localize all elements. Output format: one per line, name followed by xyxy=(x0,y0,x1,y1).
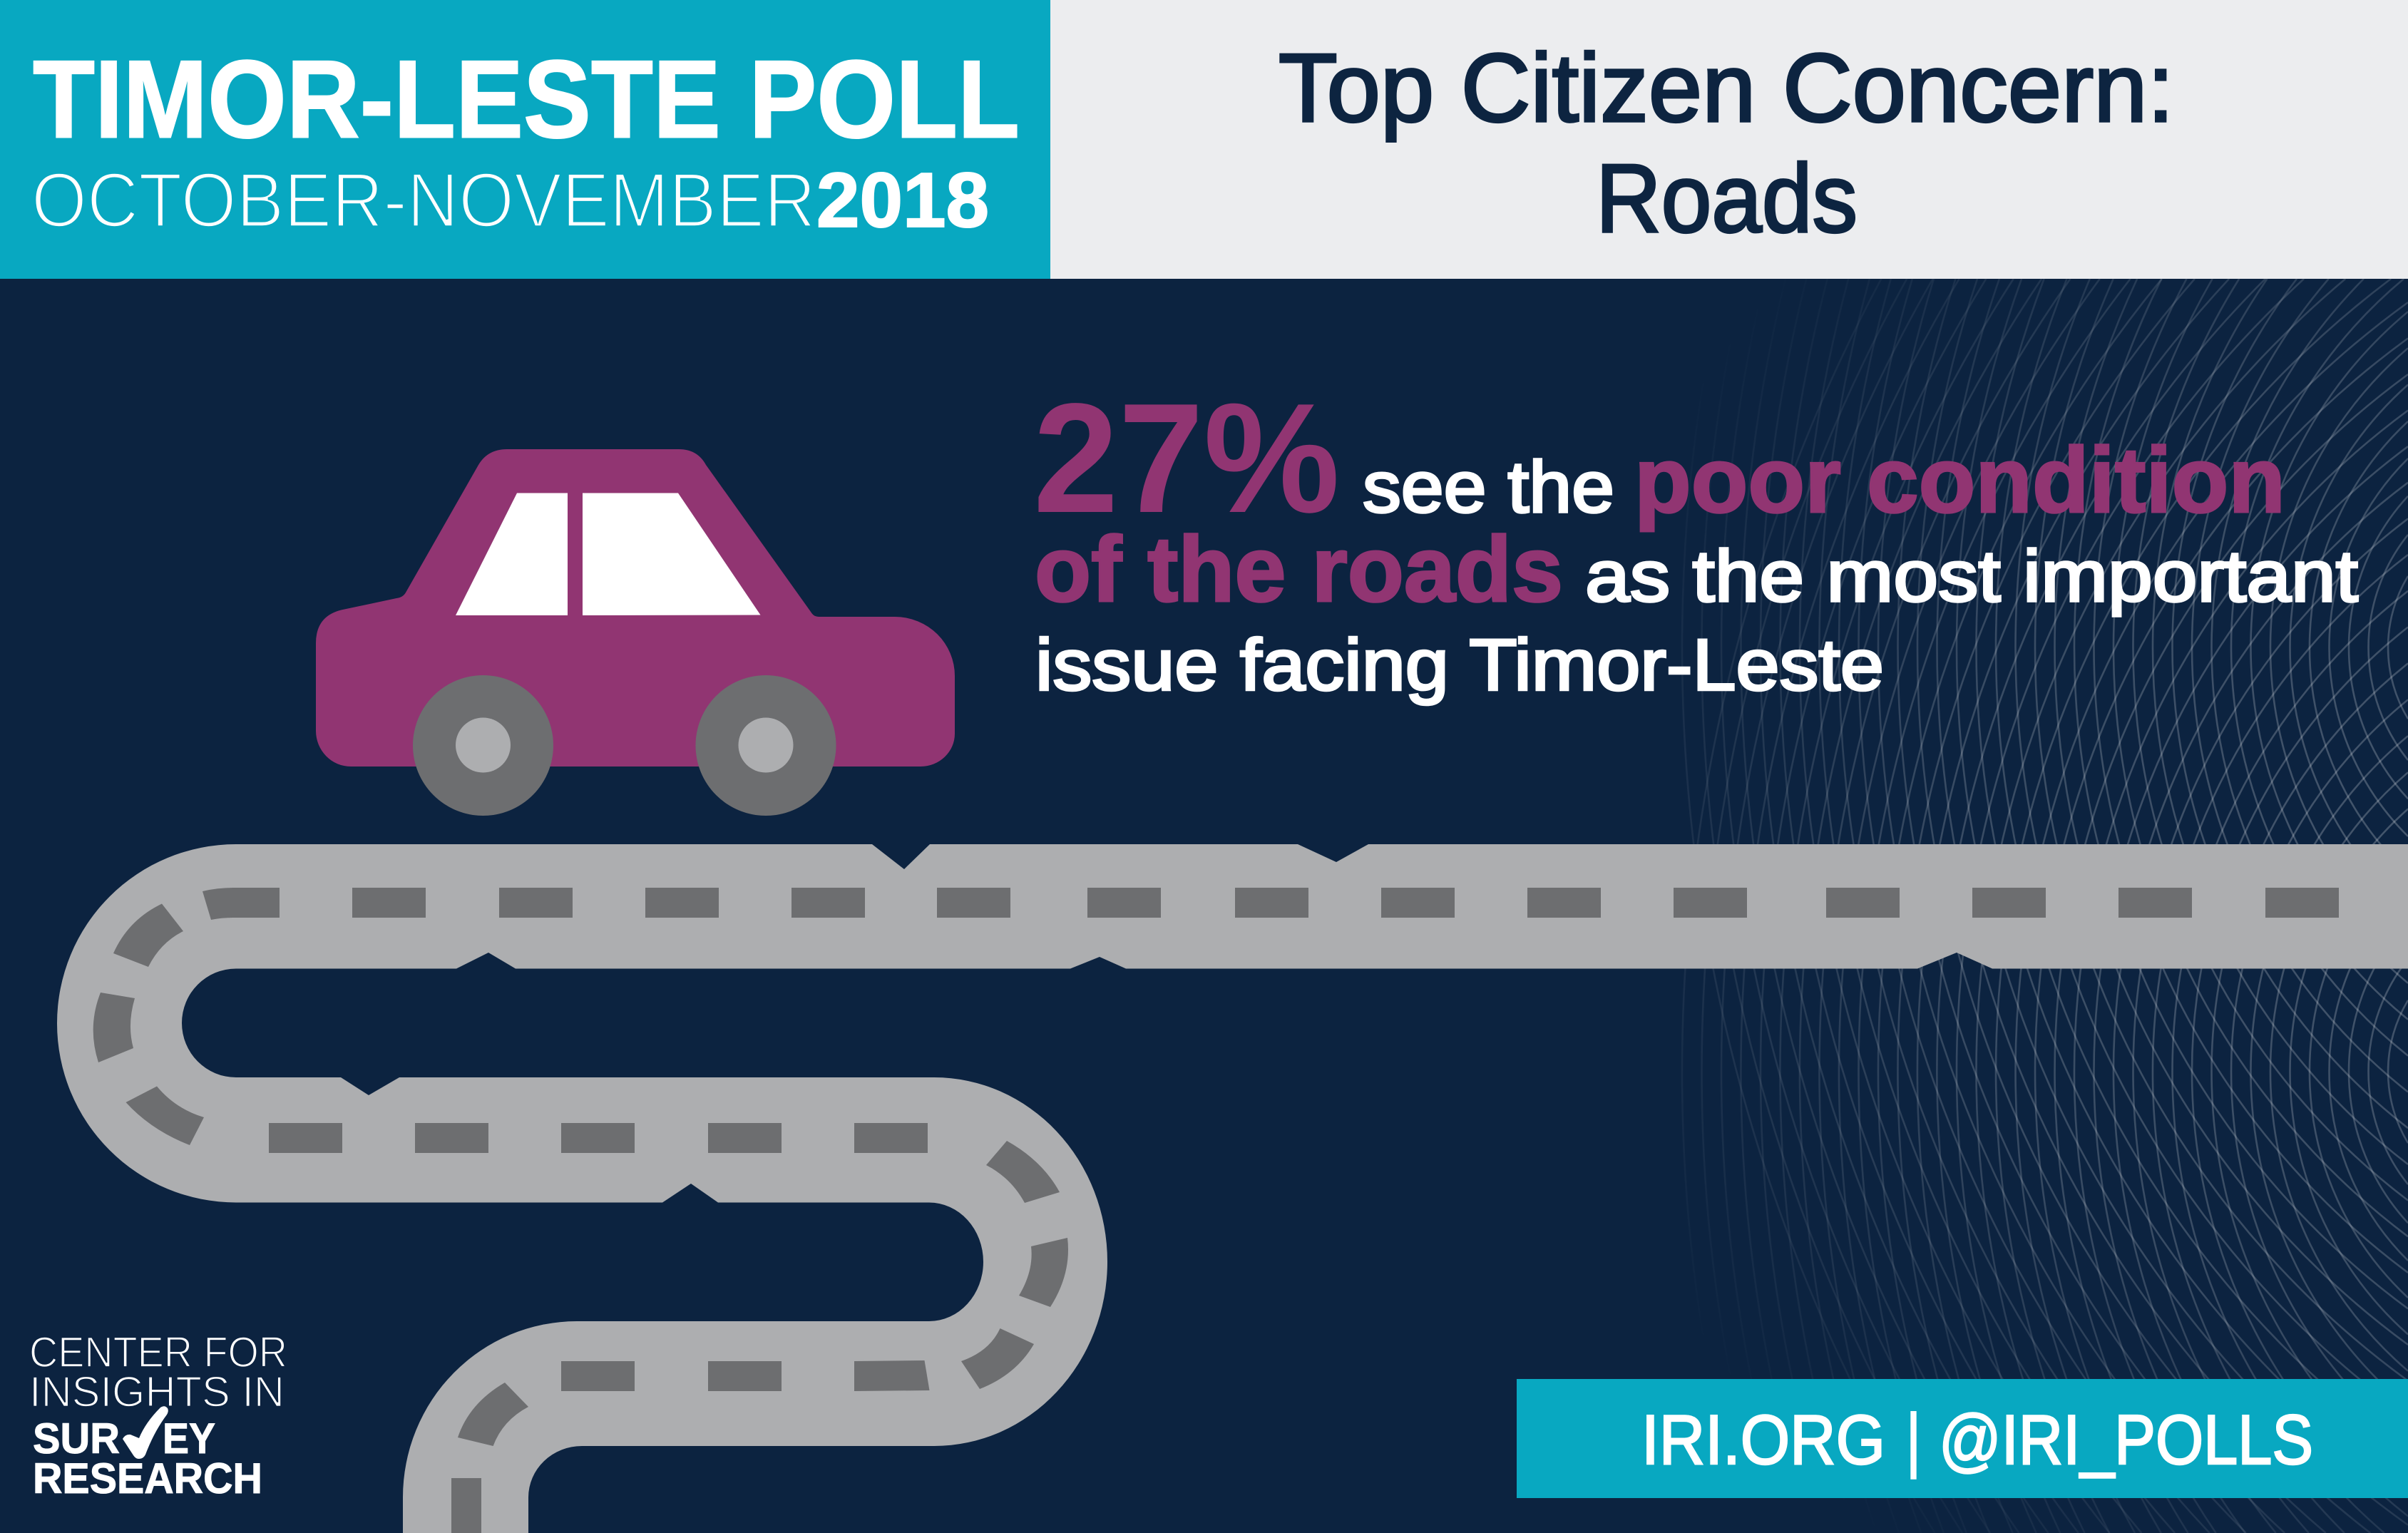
car body xyxy=(316,449,955,766)
road surface xyxy=(57,844,2408,1533)
subtitle: year: 2018 xyxy=(816,157,989,244)
text: issue facing Timor-Leste: issue facing Timor-Leste xyxy=(1035,625,1884,706)
statistic text block xyxy=(1033,371,2358,706)
logo text: research: RESEARCH xyxy=(33,1455,262,1502)
header panel: poll title xyxy=(0,0,1050,279)
logo text: ey: EY xyxy=(163,1415,215,1462)
rear wheel xyxy=(413,675,553,816)
link: IRI.ORG: IRI.ORG xyxy=(1641,1400,1885,1479)
icon: purple car xyxy=(316,449,955,816)
background moire line pattern xyxy=(1682,279,2408,1533)
logo: Center for Insights in Survey Research xyxy=(29,1328,287,1502)
subtitle: date range: OCTOBER-NOVEMBER xyxy=(31,157,816,244)
logo text: insights in: INSIGHTS IN xyxy=(29,1368,285,1416)
statistic: 27%: 27% xyxy=(1033,371,1340,545)
heading line one: Top Citizen Concern: xyxy=(1279,34,2174,142)
car front window xyxy=(583,493,760,615)
handle: @IRI_POLLS: @IRI_POLLS xyxy=(1939,1400,2313,1479)
title: Timor-Leste Poll: TIMOR-LESTE POLL xyxy=(33,37,1020,161)
header panel: top citizen concern xyxy=(1050,0,2408,279)
highlight: poor condition: poor condition xyxy=(1634,428,2285,532)
winding road xyxy=(57,844,2408,1533)
front wheel xyxy=(696,675,836,816)
heading line two: Roads xyxy=(1596,144,1858,252)
road centre dashes xyxy=(93,888,2339,1533)
car rear window xyxy=(456,493,568,615)
text: as the most important: as the most important xyxy=(1585,535,2358,617)
icon: check mark standing in for V xyxy=(123,1406,168,1459)
call-to-action banner xyxy=(1517,1379,2408,1498)
logo text: center for: CENTER FOR xyxy=(29,1328,287,1376)
separator: | xyxy=(1904,1398,1923,1480)
text: see the: see the xyxy=(1363,446,1614,528)
logo text: sur: SUR xyxy=(33,1415,120,1462)
highlight: of the roads: of the roads xyxy=(1035,517,1563,621)
